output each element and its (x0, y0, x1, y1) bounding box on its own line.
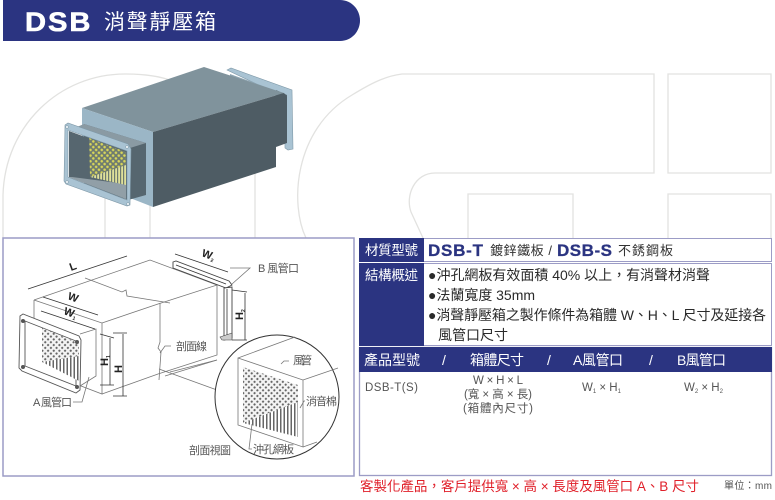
diagram label: section view: 剖面視圖 (189, 443, 231, 457)
table header: A風管口 (573, 352, 623, 368)
dimension labels: 2 (241, 309, 247, 312)
diagram label: perforated plate: 沖孔網板 (253, 442, 294, 456)
bullet two: ●法蘭寬度 35mm (428, 287, 535, 303)
duct line drawing (34, 260, 217, 394)
table row: 2 (695, 389, 699, 395)
bullet three continued: 風管口尺寸 (438, 327, 508, 343)
panel: structure: 結構概述 (365, 268, 418, 283)
far flange (227, 68, 293, 150)
table row: W (582, 382, 593, 394)
diagram label: A duct: A 風管口 (33, 395, 72, 409)
dimension labels: W (200, 248, 214, 262)
table row: 2 (720, 389, 724, 395)
dimension labels: 2 (209, 258, 214, 264)
panel: dimension diagram (3, 238, 354, 476)
material label (359, 238, 424, 262)
table row: (寬 × 高 × 長) (464, 387, 532, 401)
background watermark outlines (3, 74, 771, 238)
table header: / (649, 352, 653, 368)
dimension labels: 1 (71, 316, 76, 322)
dimension labels: 1 (106, 355, 112, 358)
diagram label: duct: 風管 (293, 353, 312, 367)
table row: 1 (593, 389, 597, 395)
title banner (3, 0, 360, 41)
table row: W (684, 382, 695, 394)
product 3D illustration (64, 67, 293, 207)
DSB-S: DSB-S (557, 241, 612, 260)
dimension labels: W (62, 306, 76, 320)
callout: detail circle (215, 335, 339, 459)
diagram label: sound insulation: 消音棉 (306, 394, 337, 408)
table header (359, 347, 772, 372)
DSB-T: DSB-T (428, 241, 484, 260)
bullet three: ●消聲靜壓箱之製作條件為箱體 W、H、L 尺寸及延接各 (428, 307, 766, 323)
flange bolts (66, 126, 130, 206)
table row: 1 (618, 389, 622, 395)
table header: / (442, 352, 446, 368)
panel: material (359, 238, 772, 262)
footer note: 客製化產品，客戶提供寬 × 高 × 長度及風管口 A、B 尺寸 (360, 478, 699, 494)
structure label (359, 263, 424, 346)
table row (365, 375, 724, 415)
table row: DSB-T(S) (365, 382, 418, 394)
yellow stripes (90, 165, 126, 185)
panel: material: 材質型號 (365, 243, 418, 258)
B flange drawing (173, 261, 232, 340)
table header: / (547, 352, 551, 368)
diagram label: section line: 剖面線 (176, 339, 207, 353)
bullet one: ●沖孔網板有效面積 40% 以上，有消聲材消聲 (428, 267, 710, 283)
dimension labels: L (68, 260, 79, 274)
leader lines (73, 268, 305, 449)
panel: product table (359, 347, 772, 476)
box front (82, 108, 153, 207)
box right side (153, 93, 287, 207)
panel: structure (359, 263, 772, 346)
diagram label: B duct: B 風管口 (258, 261, 299, 275)
table header: 箱體尺寸 (470, 352, 524, 368)
unit note: 單位：mm (724, 479, 772, 492)
dimension labels: H (99, 358, 111, 366)
interior wall (69, 131, 126, 199)
A flange drawing (19, 314, 96, 393)
galvanized: 鍍鋅鐵板 / (490, 243, 552, 258)
table row: × H (698, 382, 720, 394)
table row: W × H × L (473, 375, 524, 387)
dimension labels (62, 248, 247, 373)
box top (82, 67, 284, 132)
A duct (84, 124, 146, 200)
A flange (64, 123, 131, 206)
stainless: 不銹鋼板 (618, 243, 673, 258)
table row: (箱體內尺寸) (463, 401, 533, 415)
table row: × H (596, 382, 618, 394)
title name: 消聲靜壓箱 (104, 11, 216, 34)
title code: DSB (25, 7, 92, 37)
table header: 產品型號 (364, 352, 420, 368)
dimension lines (28, 254, 247, 396)
table header: B風管口 (677, 352, 726, 368)
yellow mesh (89, 138, 126, 177)
dimension labels: H (113, 365, 125, 373)
dimension labels: H (234, 312, 246, 320)
dimension labels: W (66, 291, 80, 306)
